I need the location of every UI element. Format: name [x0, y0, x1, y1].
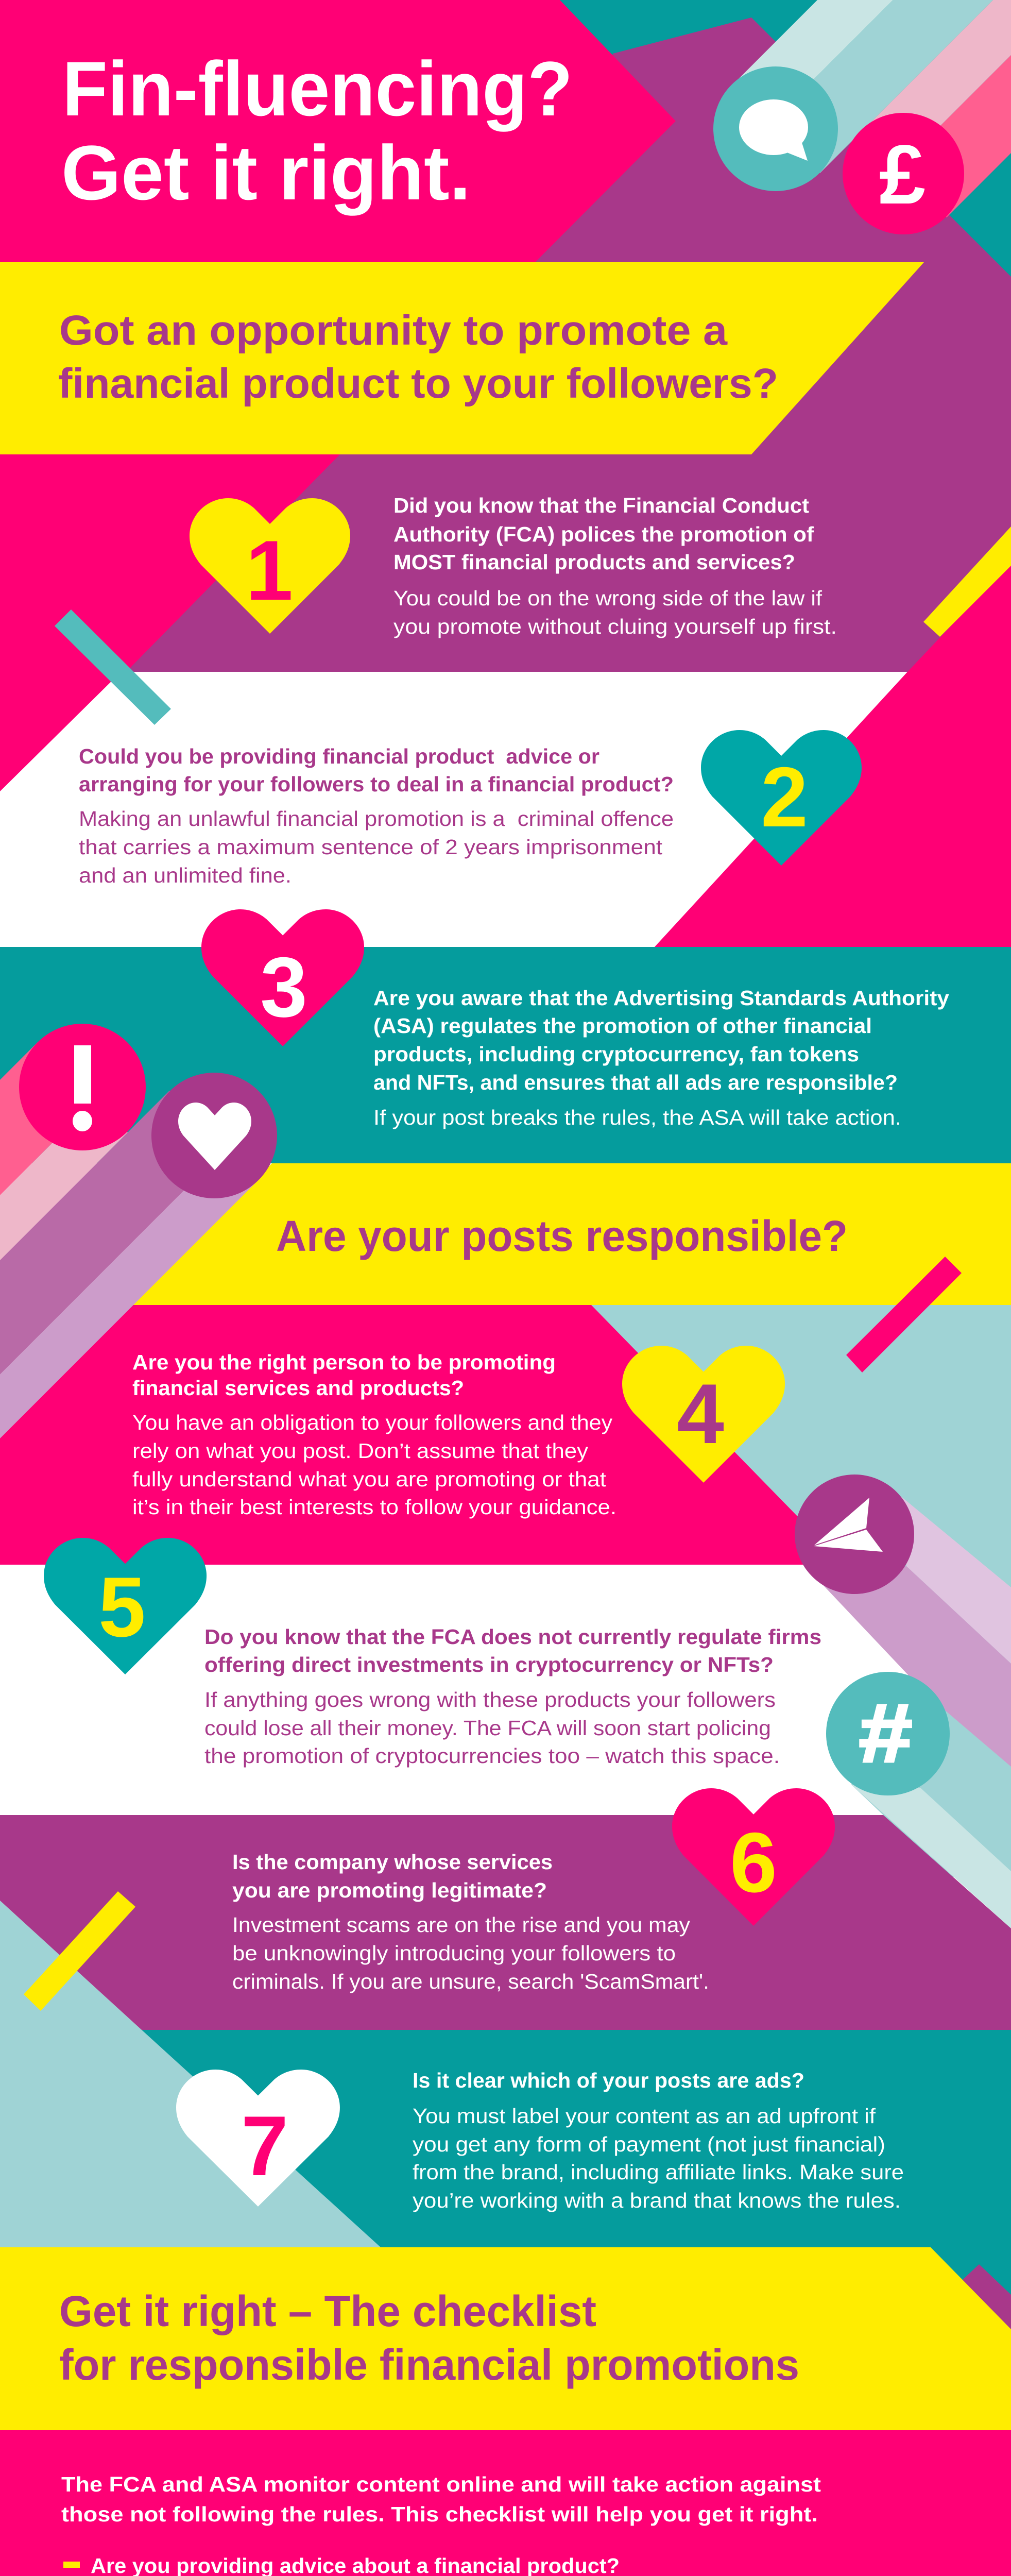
text: right person: fully understand what you are promoting or that	[132, 1467, 607, 1491]
text: FCA question: You could be on the wrong side of the law if	[393, 586, 822, 610]
text: right person: You have an obligation to your followers and they	[132, 1411, 613, 1434]
decorative beams behind left icons	[0, 1042, 128, 1260]
text: right person: financial services and products?	[132, 1376, 464, 1400]
text: unlawful promotion	[79, 744, 674, 887]
text: ASA question	[373, 986, 949, 1129]
header pink arrow panel	[0, 0, 676, 262]
icon: heart 6	[672, 1788, 835, 1926]
panel 6 background	[0, 1815, 1011, 2030]
panel: checklist banner	[0, 2247, 1011, 2430]
icon: heart 5: 5	[98, 1560, 146, 1654]
text: legitimate company: you are promoting legitimate?	[232, 1878, 547, 1902]
text: labelling ads: from the brand, including affiliate links. Make sure	[413, 2160, 904, 2184]
accent bar: teal	[55, 609, 171, 725]
checklist intro	[61, 2472, 821, 2526]
heading: checklist	[59, 2287, 799, 2389]
text: legitimate company: criminals. If you are unsure, search 'ScamSmart'.	[232, 1970, 709, 1993]
text: right person	[132, 1350, 616, 1519]
text: crypto regulation: offering direct investments in cryptocurrency or NFTs?	[204, 1653, 774, 1676]
accent bar: yellow left	[24, 1891, 135, 2011]
heading: responsible posts: Are your posts responsible?	[276, 1212, 848, 1260]
accent bar: pink	[846, 1257, 962, 1372]
heading: opening question	[58, 307, 778, 407]
text: right person: Are you the right person to be promoting	[132, 1350, 556, 1374]
title: Fin-fluencing?	[62, 45, 573, 132]
icon: heart 7: 7	[241, 2098, 288, 2193]
text: ASA question: and NFTs, and ensures that all ads are responsible?	[373, 1071, 898, 1094]
icon: heart 1	[190, 498, 350, 634]
text: labelling ads: you get any form of payment (not just financial)	[413, 2132, 885, 2156]
text: legitimate company: Investment scams are on the rise and you may	[232, 1913, 691, 1937]
text: legitimate company	[232, 1850, 709, 1993]
text: legitimate company: be unknowingly introducing your followers to	[232, 1941, 676, 1965]
panel 6	[232, 1788, 835, 1993]
beams behind plane and hash icons	[819, 1497, 1011, 1928]
icon: heart 4: 4	[677, 1366, 724, 1461]
text: crypto regulation: the promotion of cryptocurrencies too – watch this space.	[204, 1744, 780, 1768]
icon: speech bubble	[713, 66, 838, 191]
text: unlawful promotion: arranging for your followers to deal in a financial product?	[79, 772, 674, 796]
header: social icons with light beams	[713, 0, 1011, 234]
icon: pound sign: £	[879, 127, 926, 222]
icon: heart in circle	[151, 1073, 277, 1198]
icon: heart 4	[622, 1346, 785, 1483]
text: FCA question: Did you know that the Financial Conduct	[393, 494, 809, 517]
panel: responsible posts banner	[132, 1163, 1011, 1305]
icon: heart 5	[44, 1538, 207, 1674]
icon: heart 2: 2	[761, 750, 808, 844]
text: crypto regulation	[204, 1625, 821, 1768]
icon: hash	[826, 1672, 950, 1795]
text: unlawful promotion: Making an unlawful financial promotion is a criminal offence	[79, 807, 674, 831]
panel 7	[176, 2069, 904, 2212]
panel 3	[201, 909, 949, 1129]
text: crypto regulation: If anything goes wrong with these products your followers	[204, 1688, 776, 1711]
heading: checklist: for responsible financial promotions	[59, 2341, 799, 2389]
text: ASA question: Are you aware that the Advertising Standards Authority	[373, 986, 949, 1010]
icon: heart 7	[176, 2070, 340, 2207]
icon: heart 2	[701, 730, 862, 866]
text: labelling ads: You must label your content as an ad upfront if	[413, 2104, 876, 2128]
heading: opening question: Got an opportunity to promote a	[59, 307, 728, 354]
text: FCA question: you promote without cluing yourself up first.	[393, 615, 837, 638]
text: FCA question	[393, 494, 837, 638]
text: ASA question: (ASA) regulates the promotion of other financial	[373, 1014, 872, 1038]
icon: heart 3	[201, 909, 364, 1046]
panel 2	[79, 730, 862, 887]
panel: checklist	[61, 2472, 821, 2576]
checklist intro: those not following the rules. This checklist will help you get it right.	[61, 2502, 818, 2526]
checklist intro: The FCA and ASA monitor content online and will take action against	[61, 2472, 821, 2496]
text: unlawful promotion: that carries a maximum sentence of 2 years imprisonment	[79, 835, 663, 859]
beams behind heart icon	[0, 1091, 259, 1438]
text: FCA question: MOST financial products and services?	[393, 550, 795, 574]
icon: exclamation mark	[19, 1024, 146, 1150]
text: ASA question: If your post breaks the rules, the ASA will take action.	[373, 1106, 901, 1129]
text: right person: rely on what you post. Don’t assume that they	[132, 1439, 589, 1463]
title	[61, 45, 573, 216]
panel 5	[44, 1538, 821, 1768]
title: Get it right.	[61, 129, 471, 216]
icon: hash: #	[859, 1687, 912, 1779]
text: crypto regulation: Do you know that the FCA does not currently regulate firms	[204, 1625, 821, 1649]
heading: checklist: Get it right – The checklist	[59, 2287, 596, 2335]
text: unlawful promotion: and an unlimited fine.	[79, 863, 292, 887]
text: unlawful promotion: Could you be providing financial product advice or	[79, 744, 599, 768]
text: crypto regulation: could lose all their money. The FCA will soon start policing	[204, 1716, 771, 1740]
icon: heart 1: 1	[246, 523, 293, 618]
icon: pound sign	[843, 113, 964, 234]
text: legitimate company: Is the company whose services	[232, 1850, 553, 1874]
text: labelling ads	[413, 2069, 904, 2212]
panel 1	[190, 494, 837, 638]
heading: opening question: financial product to your followers?	[58, 360, 778, 407]
icon: heart 6: 6	[730, 1815, 777, 1910]
text: FCA question: Authority (FCA) polices the promotion of	[393, 522, 814, 546]
panel: opening question banner	[0, 262, 924, 454]
text: labelling ads: Is it clear which of your posts are ads?	[413, 2069, 804, 2092]
accent bar: yellow right	[923, 527, 1011, 637]
text: right person: it’s in their best interests to follow your guidance.	[132, 1495, 616, 1519]
panel 4	[132, 1346, 785, 1519]
icon: heart 3: 3	[260, 940, 307, 1035]
text: ASA question: products, including cryptocurrency, fan tokens	[373, 1042, 859, 1066]
text: labelling ads: you’re working with a brand that knows the rules.	[413, 2189, 901, 2212]
icon: paper plane	[795, 1475, 914, 1594]
